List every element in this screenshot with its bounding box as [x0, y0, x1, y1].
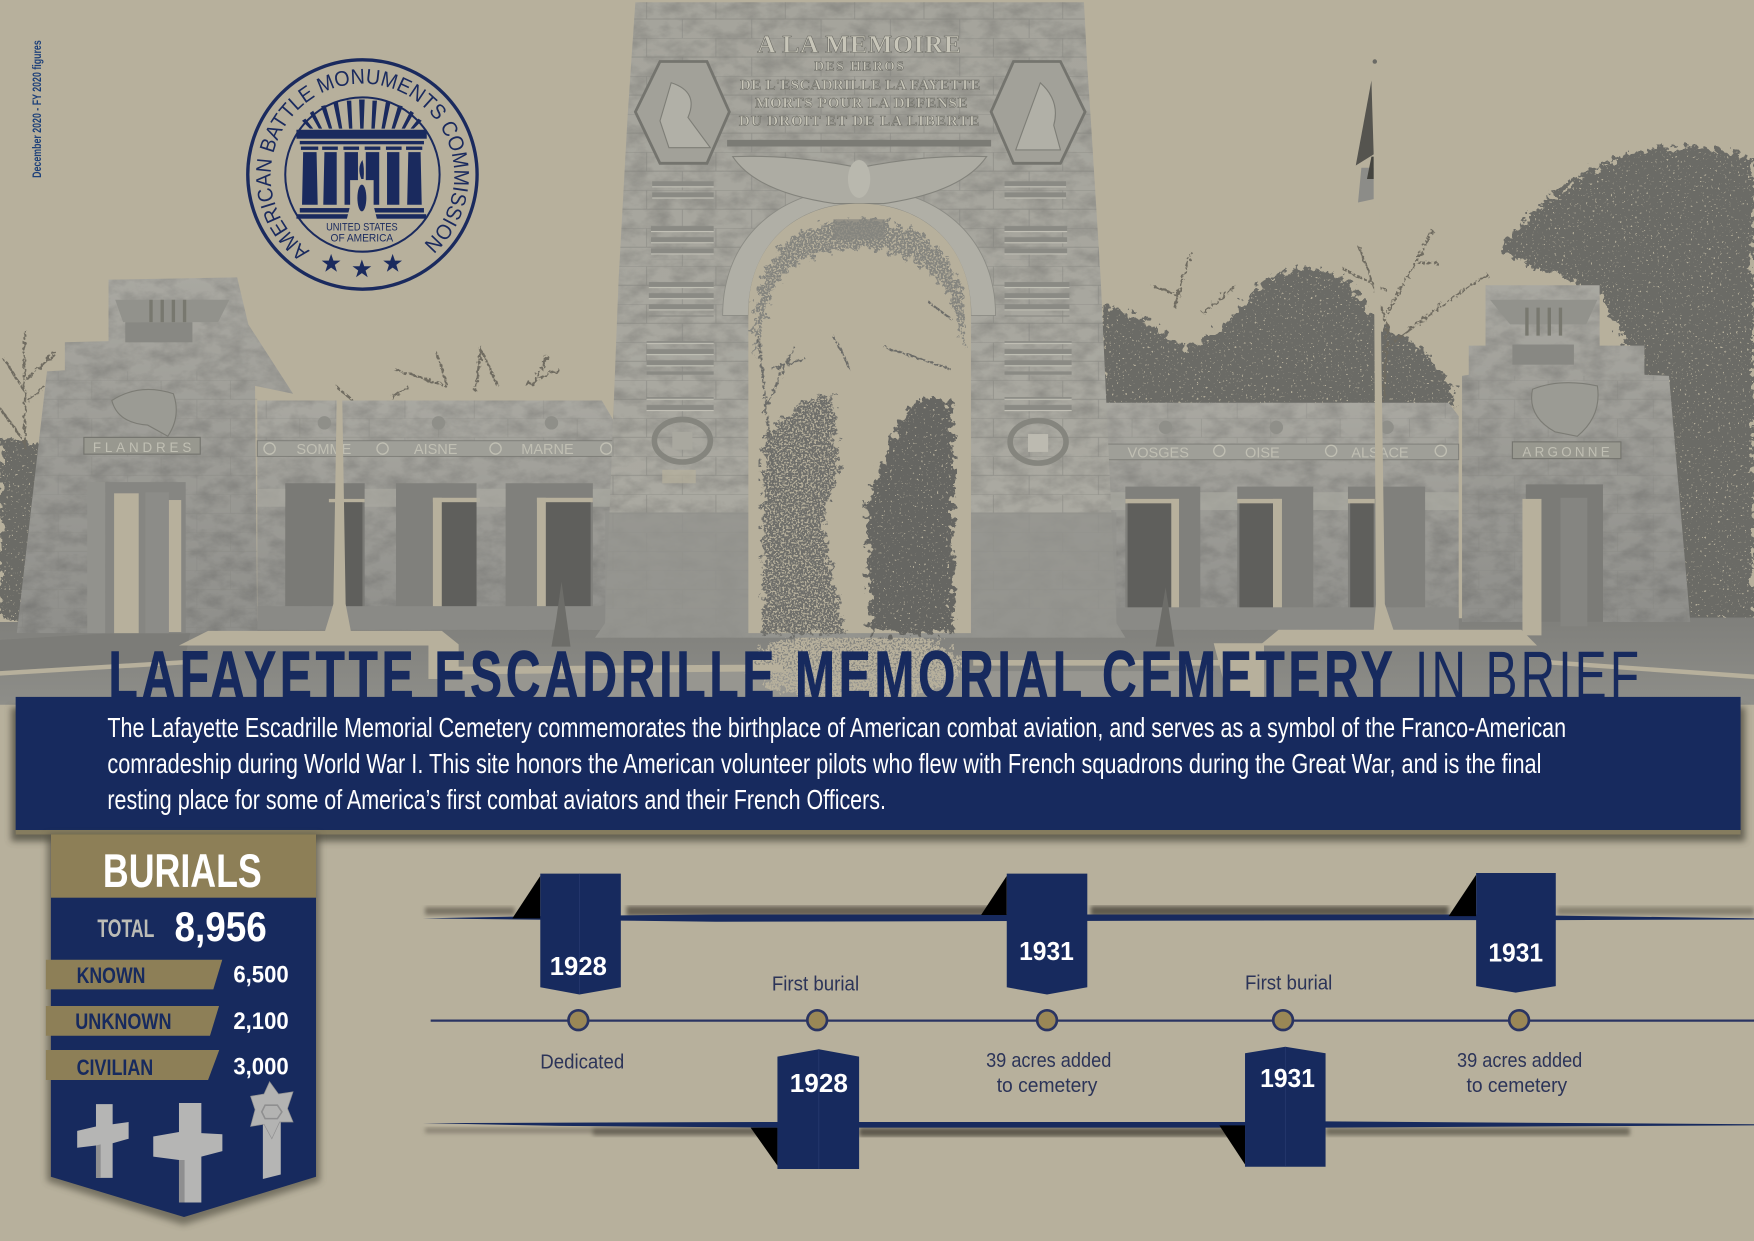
VOSGES OISE ALSACE frieze: OISE [1245, 446, 1280, 462]
timeline labels: First burial [1245, 972, 1332, 994]
VOSGES OISE ALSACE frieze: VOSGES [1128, 446, 1189, 462]
tower inscription: A LA MEMOIRE [757, 30, 961, 59]
plaza lower slab [441, 671, 1214, 705]
left wing [17, 277, 1690, 633]
fountain spray on plaza [749, 630, 962, 701]
feathered headdress carving [1532, 383, 1598, 436]
burials heading: BURIALS [103, 844, 262, 897]
right pale plinth [1260, 630, 1537, 645]
milestone flag: 1931 first burial: 1931 [1260, 1065, 1315, 1093]
left pavilion [17, 277, 293, 633]
total: 8,956 [175, 904, 267, 950]
left colonnade [257, 400, 613, 630]
timeline: axis [431, 1020, 1754, 1022]
timeline markers [568, 1010, 1529, 1030]
timeline: upper ribbon [423, 914, 1754, 922]
plaza ground [0, 617, 1754, 705]
bare branches [0, 229, 1488, 447]
right pavilion details [1490, 300, 1621, 635]
tower inscription: MORTS POUR LA DEFENSE [755, 95, 968, 111]
flag [1356, 59, 1377, 202]
left flagpole and base [324, 400, 351, 633]
title: LAFAYETTE ESCADRILLE MEMORIAL CEMETERY [109, 639, 1393, 714]
milestone flag: 1931: 1931 [1019, 938, 1074, 966]
timeline: lower ribbon shadow [425, 1128, 1630, 1137]
total: TOTAL [97, 916, 154, 943]
pavilion masonry [17, 371, 1690, 633]
tower pedestal [595, 512, 1125, 638]
seal ring text: AMERICAN BATTLE MONUMENTS COMMISSION [256, 68, 469, 259]
temple [296, 130, 427, 219]
timeline: lower ribbon [423, 1121, 1754, 1128]
timeline labels: First burial [772, 974, 859, 996]
panel: burials [46, 834, 316, 1217]
icon: large cross [153, 1103, 222, 1203]
arch tree right [867, 397, 953, 633]
icon: small cross [77, 1104, 129, 1178]
winged figure [733, 156, 987, 204]
row: unknown [46, 1006, 289, 1036]
hexagon relief right [991, 62, 1085, 163]
timeline labels [540, 972, 1582, 1097]
arch branches [758, 302, 951, 492]
wreath right [1010, 421, 1066, 463]
date note: December 2020 - FY 2020 figures [31, 40, 44, 178]
tower inscription: DU DROIT ET DE LA LIBERTE [739, 113, 979, 129]
inner vault [755, 219, 964, 360]
seal stars [322, 254, 402, 277]
milestone flag: 1931 first burial [1219, 1047, 1326, 1167]
SOMME AISNE MARNE frieze: SOMME [296, 442, 352, 458]
timeline labels: 39 acres added [986, 1050, 1111, 1072]
row: known: 6,500 [233, 962, 289, 989]
seal country text line two: OF AMERICA [331, 233, 394, 245]
ARGONNE inscription: ARGONNE [1522, 444, 1610, 459]
arch tree left [763, 394, 845, 633]
timeline labels: 39 acres added [1457, 1050, 1582, 1072]
total [97, 904, 267, 950]
plaza steps [0, 633, 190, 671]
hexagon relief left [635, 62, 729, 163]
milestone flag: 1931 [981, 874, 1087, 994]
tower masonry [605, 2, 1116, 623]
milestone flag: 1931 right: 1931 [1488, 940, 1543, 968]
banner: introduction [16, 697, 1741, 834]
intro text: resting place for some of America’s first combat aviators and their French Officers. [107, 784, 886, 815]
icon: star of David marker [251, 1082, 293, 1179]
title: IN BRIEF [1415, 639, 1639, 714]
seal country text: UNITED STATES [326, 221, 398, 233]
right flagpole and base [1374, 201, 1394, 631]
row: unknown: 2,100 [233, 1008, 289, 1035]
seal pedestal and flame [347, 160, 377, 219]
right pavilion [1462, 285, 1690, 622]
trees behind the memorial [0, 146, 1754, 622]
timeline labels: to cemetery [997, 1075, 1098, 1097]
memorial photograph [0, 2, 1754, 705]
left colonnade details [257, 416, 613, 647]
burials panel shadow [47, 834, 320, 1225]
intro text [107, 712, 1566, 815]
VOSGES OISE ALSACE frieze: ALSACE [1351, 446, 1409, 462]
milestone flag: 1928 dedicated [512, 874, 621, 994]
rising sun rays [302, 100, 422, 129]
row: civilian: CIVILIAN [77, 1055, 153, 1080]
row: civilian: 3,000 [233, 1053, 289, 1080]
left pavilion details [84, 300, 229, 633]
arch opening [748, 204, 971, 633]
milestone flag: 1928 first burial [751, 1049, 859, 1169]
right colonnade [1102, 403, 1459, 630]
SOMME AISNE MARNE frieze: AISNE [414, 442, 458, 458]
row: unknown: UNKNOWN [75, 1009, 171, 1034]
milestone flag: 1928 dedicated: 1928 [550, 953, 607, 981]
timeline labels: Dedicated [540, 1051, 624, 1073]
tower inscription [739, 30, 980, 129]
timeline labels: to cemetery [1467, 1075, 1568, 1097]
name plaques right [1005, 179, 1072, 413]
arch voussoirs [723, 188, 996, 315]
cornice band [727, 140, 991, 147]
row: civilian [46, 1050, 289, 1080]
seal: American Battle Monuments Commission [246, 58, 479, 291]
row: known: KNOWN [77, 963, 145, 988]
left pale plinth [179, 631, 459, 679]
name plaques left [647, 179, 714, 413]
milestone flag: 1931 right [1449, 873, 1556, 993]
tower inscription: DE L'ESCADRILLE LA FAYETTE [740, 77, 980, 93]
plaza light strips [0, 643, 1754, 699]
row: known [46, 960, 289, 989]
SOMME AISNE MARNE frieze: MARNE [521, 442, 574, 458]
banner shadow [11, 707, 1745, 841]
wreath left [654, 419, 710, 483]
timeline: upper ribbon shadow [425, 906, 1754, 916]
milestone flag: 1928 first burial: 1928 [790, 1070, 848, 1098]
FLANDRES inscription: FLANDRES [93, 440, 191, 455]
feathered headdress carving [112, 389, 176, 436]
central arch tower [595, 2, 1125, 638]
tower inscription: DES HEROS [814, 58, 904, 73]
right colonnade details [1102, 421, 1459, 647]
arch vault plaque [833, 219, 885, 239]
